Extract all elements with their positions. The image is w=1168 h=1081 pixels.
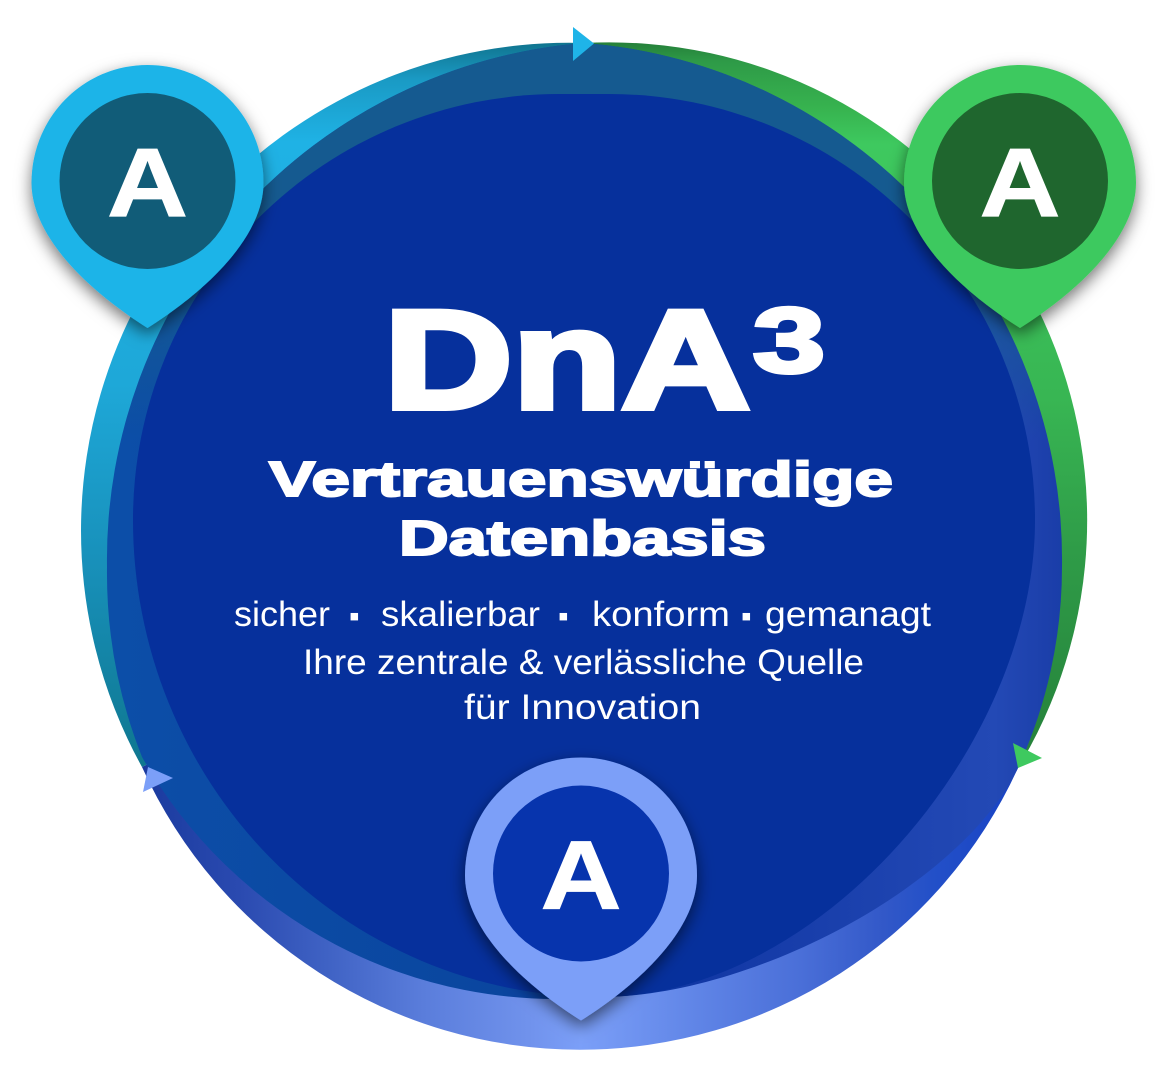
middle band top tint bbox=[140, 44, 1032, 392]
text: tagline bbox=[303, 643, 864, 727]
text: attributes bbox=[234, 595, 931, 634]
arrow: periwinkle triangle left bbox=[143, 767, 173, 792]
pin: green bbox=[904, 65, 1136, 328]
arc: blue ring segment bbox=[142, 546, 1018, 1050]
pin: green: A bbox=[979, 129, 1061, 237]
pin: periwinkle bbox=[465, 758, 697, 1020]
central dark blue disc bbox=[133, 94, 1035, 997]
arc: green ring segment bbox=[584, 42, 1087, 768]
text: attributes: ▪ bbox=[558, 600, 569, 633]
pin: cyan bbox=[32, 65, 264, 328]
text: tagline: für Innovation bbox=[464, 688, 701, 727]
text: attributes: skalierbar bbox=[381, 595, 540, 634]
arrow: green triangle right bbox=[1013, 743, 1042, 768]
middle band layer bbox=[107, 43, 1062, 999]
heading: Vertrauenswürdige Datenbasis: Datenbasis bbox=[399, 512, 766, 566]
text: attributes: ▪ bbox=[741, 600, 752, 633]
title: DnA³ bbox=[384, 281, 825, 438]
pin: periwinkle: A bbox=[540, 822, 622, 930]
text: attributes: gemanagt bbox=[765, 595, 931, 634]
title: DnA³: DnA bbox=[384, 281, 750, 438]
heading: Vertrauenswürdige Datenbasis bbox=[269, 453, 893, 566]
text: attributes: konform bbox=[592, 595, 730, 634]
arrow: cyan triangle top bbox=[573, 27, 594, 61]
arc: cyan ring segment bbox=[81, 43, 584, 767]
text: tagline: Ihre zentrale & verlässliche Quelle bbox=[303, 643, 864, 682]
pin: cyan: A bbox=[107, 129, 188, 237]
title: DnA³: 3 bbox=[753, 290, 825, 392]
text: attributes: ▪ bbox=[349, 600, 360, 633]
text: attributes: sicher bbox=[234, 595, 330, 634]
heading: Vertrauenswürdige Datenbasis: Vertrauenswürdige bbox=[269, 453, 893, 507]
